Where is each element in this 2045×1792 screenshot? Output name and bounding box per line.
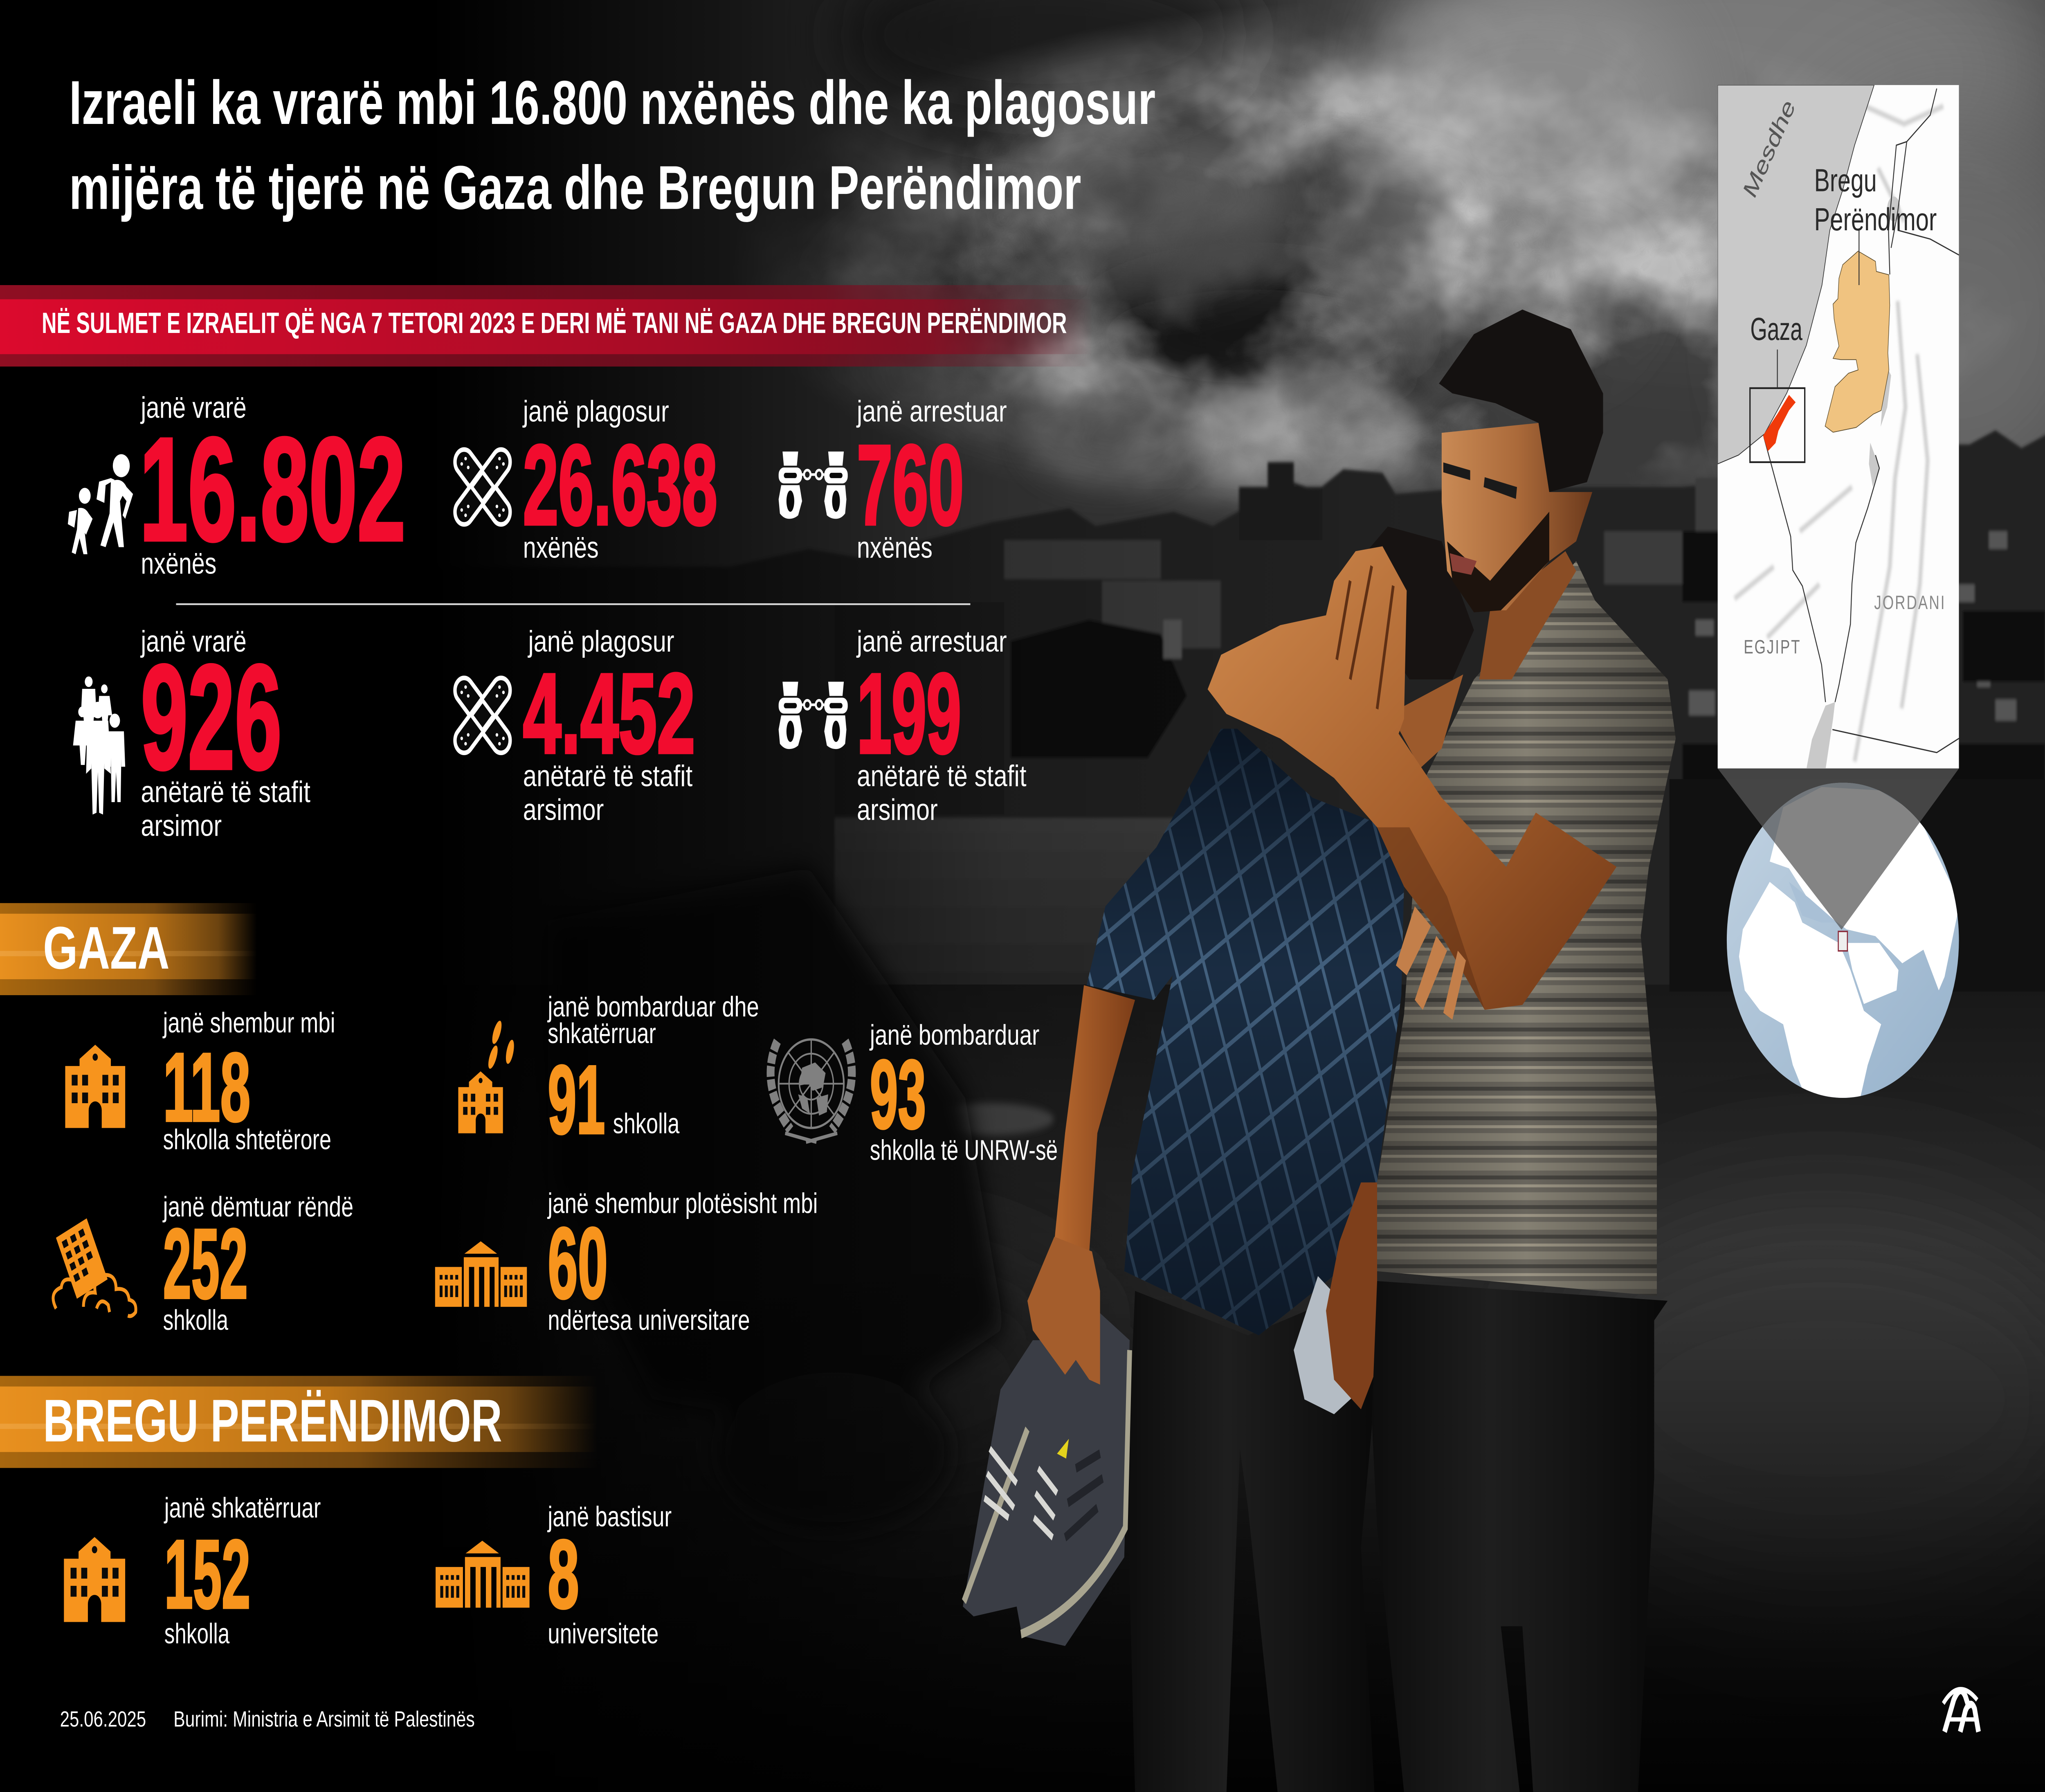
panel: wounded staff [451, 624, 695, 826]
man face [1442, 423, 1592, 612]
photo: two boys embracing [963, 310, 1676, 1792]
panel: wounded students [451, 394, 717, 564]
icon: school under bombs [458, 1019, 516, 1133]
man arms around boy [1208, 546, 1616, 1020]
panel: arrested staff: 199 [857, 650, 961, 777]
terrain shading [1735, 106, 1943, 761]
panel: UNRWA schools: shkolla të UNRW-së [870, 1134, 1058, 1166]
panel: wounded staff: janë plagosur [528, 624, 674, 658]
skyline [0, 427, 2045, 995]
panel: killed students: janë vrarë [140, 390, 247, 425]
boy navy shirt [1087, 729, 1404, 1335]
panel: arrested students: 760 [857, 422, 964, 549]
man neck [1479, 551, 1576, 679]
heading: Gaza [0, 903, 257, 995]
panel: university buildings destroyed: 60 [548, 1207, 608, 1320]
locator wedge to the regional map [1718, 769, 1959, 930]
Gaza Strip [1763, 395, 1796, 451]
label: Gaza: Gaza [1750, 311, 1803, 347]
panel: schools bombed: janë bombarduar dhe [547, 991, 759, 1023]
panel: West Bank schools: 152 [164, 1520, 250, 1629]
title: Izraeli ka vrarë mbi 16.800 nxënës dhe ka plagosur [69, 69, 1155, 137]
boy jeans [1127, 1281, 1377, 1792]
panel: killed staff: arsimor [141, 808, 222, 842]
panel: wounded students: nxënës [523, 530, 599, 564]
Gaza inset box [1750, 388, 1805, 462]
sea [1718, 85, 1874, 464]
sky and smoke [0, 0, 2045, 602]
boy left arm and hand [1027, 985, 1135, 1385]
blurred seated figure [548, 868, 1004, 1532]
heading: West Bank [0, 1376, 597, 1468]
regional map [1718, 85, 1959, 769]
panel: wounded staff: arsimor [523, 792, 604, 826]
panel: wounded staff: anëtarë të stafit [523, 759, 692, 793]
icon: school [64, 1537, 125, 1622]
panel: arrested staff: arsimor [857, 792, 938, 826]
icon: school [65, 1045, 125, 1128]
boy hair and face [1350, 526, 1474, 768]
label: Jordan: JORDANI [1874, 591, 1944, 613]
ground [0, 985, 2045, 1792]
panel: schools bombed: shkatërruar [548, 1017, 656, 1049]
panel: killed students: 16.802 [139, 407, 406, 571]
icon: university [435, 1241, 527, 1307]
label: West Bank: Perëndimor [1814, 201, 1937, 237]
panel: state schools destroyed: janë shembur mbi [162, 1007, 335, 1039]
panel: arrested students: janë arrestuar [856, 394, 1007, 428]
panel: schools bombed: shkolla [613, 1108, 679, 1139]
panel: West Bank schools: shkolla [164, 1618, 229, 1649]
red banner [0, 285, 1093, 366]
panel: arrested staff: janë arrestuar [856, 624, 1007, 658]
title: mijëra të tjerë në Gaza dhe Bregun Perëndimor [69, 153, 1081, 223]
icon: children with backpacks [68, 454, 133, 554]
icon: handcuffs [779, 682, 848, 749]
label: West Bank [1814, 162, 1937, 237]
panel: state schools destroyed: 118 [163, 1033, 250, 1142]
panel: UNRWA schools: janë bombarduar [869, 1019, 1039, 1051]
globe [1727, 783, 1959, 1098]
panel: arrested staff [779, 624, 1027, 826]
panel: killed staff: 926 [141, 634, 282, 800]
label: West Bank: Bregu [1814, 162, 1877, 198]
icon: collapsing building with dust [53, 1218, 136, 1316]
panel: West Bank universities: 8 [548, 1520, 579, 1629]
icon: group of staff [73, 677, 125, 814]
label: Mediterranean: Mesdhe [1739, 94, 1800, 203]
shoes [963, 1311, 1130, 1646]
icon: crossed bandages [451, 444, 514, 530]
footer source: Burimi: Ministria e Arsimit të Palestinës [173, 1707, 475, 1731]
panel: state schools destroyed [65, 1007, 335, 1155]
title [69, 69, 1155, 223]
icon: United Nations emblem [771, 1039, 852, 1142]
panel: West Bank universities: universitete [548, 1618, 658, 1649]
man jeans [1372, 1281, 1667, 1792]
panel: arrested students [779, 394, 1007, 564]
heading: Gaza: GAZA [43, 915, 170, 982]
man hair [1439, 310, 1603, 492]
panel: UNRWA schools: 93 [870, 1041, 926, 1149]
panel: state schools destroyed: shkolla shtetërore [163, 1124, 331, 1155]
panel: arrested staff: anëtarë të stafit [857, 759, 1027, 793]
label: Egypt: EGJIPT [1744, 636, 1800, 658]
footer date: 25.06.2025 [60, 1707, 146, 1731]
panel: wounded staff: 4.452 [523, 650, 695, 777]
panel: West Bank schools: janë shkatërruar [164, 1492, 321, 1524]
lakes and rift water [1806, 197, 1900, 769]
logo: Anadolu Agency [1943, 1689, 1978, 1732]
panel: schools bombed [458, 991, 759, 1154]
panel: wounded students: janë plagosur [522, 394, 669, 428]
panel: killed staff: anëtarë të stafit [141, 775, 310, 809]
icon: handcuffs [779, 452, 848, 519]
panel: West Bank universities [436, 1501, 672, 1649]
panel: university buildings destroyed [435, 1187, 818, 1336]
panel: university buildings destroyed: ndërtesa universitare [548, 1304, 750, 1336]
panel: wounded students: 26.638 [523, 422, 717, 549]
icon: university [436, 1541, 530, 1608]
panel: killed staff: janë vrarë [140, 624, 247, 658]
West Bank [1825, 251, 1890, 432]
icon: crossed bandages [451, 673, 514, 758]
panel: schools heavily damaged [53, 1191, 353, 1336]
panel: university buildings destroyed: janë shembur plotësisht mbi [547, 1187, 818, 1219]
panel: schools heavily damaged: 252 [163, 1209, 248, 1320]
man striped shirt [1377, 561, 1676, 1296]
panel: schools heavily damaged: janë dëmtuar rëndë [162, 1191, 353, 1223]
panel: killed students [68, 390, 406, 580]
panel: killed staff [73, 624, 310, 842]
panel: killed students: nxënës [141, 546, 216, 580]
panel: schools heavily damaged: shkolla [163, 1304, 228, 1336]
panel: arrested students: nxënës [857, 530, 933, 564]
red banner: NË SULMET E IZRAELIT QË NGA 7 TETORI 2023 E DERI MË TANI NË GAZA DHE BREGUN PERËNDIMOR [42, 307, 1067, 340]
water bottle and boy right hand [1294, 1183, 1380, 1414]
heading: West Bank: BREGU PERËNDIMOR [43, 1387, 502, 1455]
panel: West Bank schools [64, 1492, 321, 1649]
borders [1764, 88, 1959, 753]
panel: schools bombed: 91 [548, 1046, 605, 1154]
panel: UNRWA schools [771, 1019, 1058, 1166]
panel: West Bank universities: janë bastisur [547, 1501, 672, 1532]
